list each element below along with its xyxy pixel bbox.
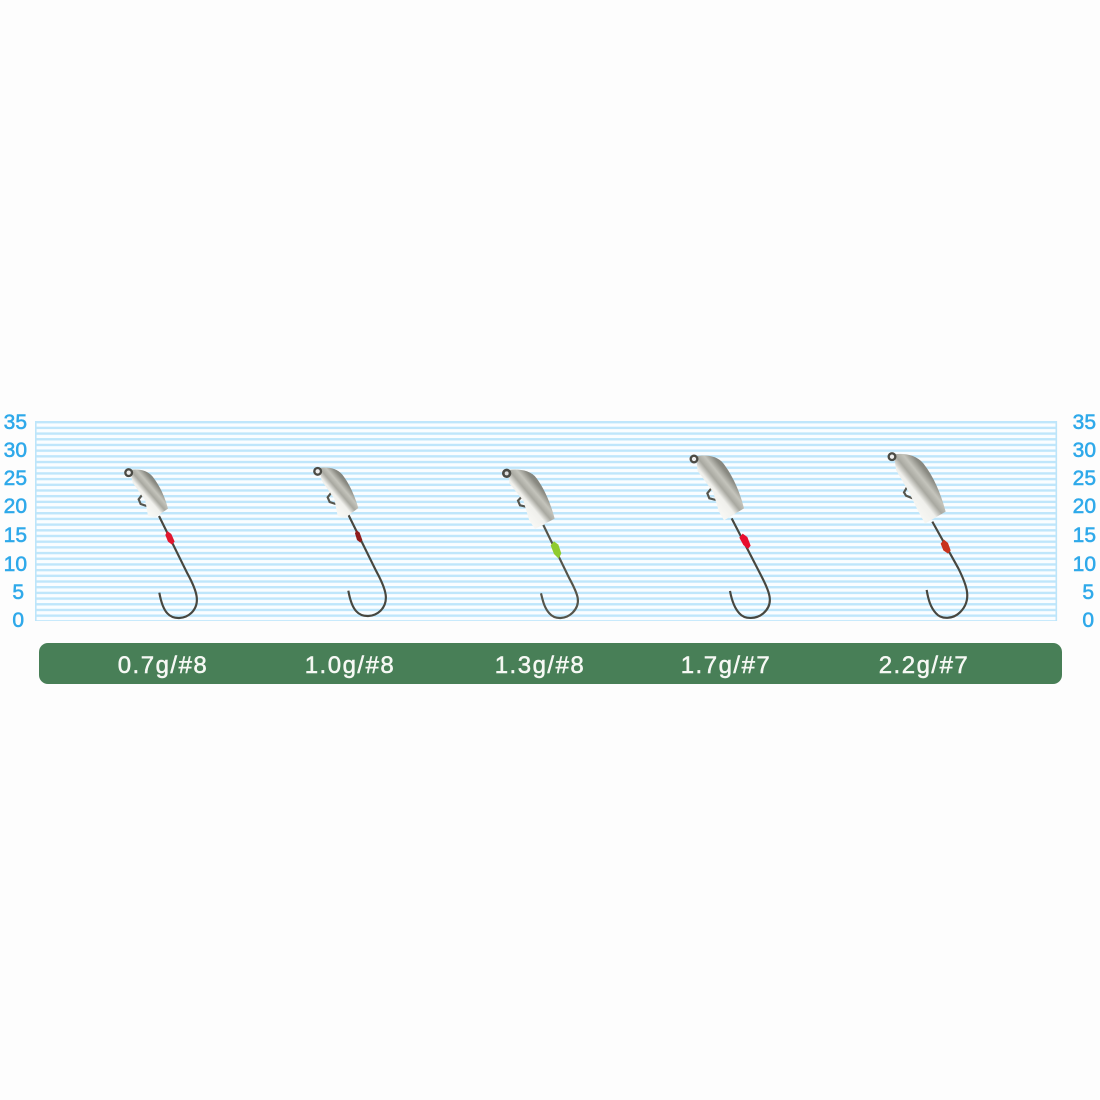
left axis numbers [4,411,27,632]
left axis numbers: 35 [4,411,27,434]
left axis numbers: 10 [4,553,27,576]
hook 1: 0.7g #8 [125,469,197,618]
right axis numbers: 30 [1073,439,1096,462]
label: 1.0g/#8: 1.0g/#8 [305,652,395,679]
hook 4: 1.7g #7 [691,456,770,618]
right axis numbers [1073,411,1096,632]
hook 5: 2.2g #7 [889,453,967,618]
label: 0.7g/#8: 0.7g/#8 [118,652,208,679]
label: 1.7g/#7: 1.7g/#7 [681,652,771,679]
right axis numbers: 25 [1073,467,1096,490]
right axis numbers: 35 [1073,411,1096,434]
chart grid [35,421,1057,621]
right axis numbers: 15 [1073,524,1096,547]
left axis numbers: 0 [12,609,24,632]
label: 1.3g/#8: 1.3g/#8 [495,652,585,679]
right axis numbers: 5 [1082,581,1094,604]
left axis numbers: 15 [4,524,27,547]
right axis numbers: 0 [1082,609,1094,632]
right axis numbers: 10 [1073,553,1096,576]
left axis numbers: 5 [12,581,24,604]
left axis numbers: 25 [4,467,27,490]
label bar [39,643,1062,684]
left axis numbers: 30 [4,439,27,462]
right axis numbers: 20 [1073,495,1096,518]
label: 2.2g/#7: 2.2g/#7 [879,652,969,679]
hook 3: 1.3g #8 [503,470,578,618]
hook 2: 1.0g #8 [314,468,386,616]
left axis numbers: 20 [4,495,27,518]
